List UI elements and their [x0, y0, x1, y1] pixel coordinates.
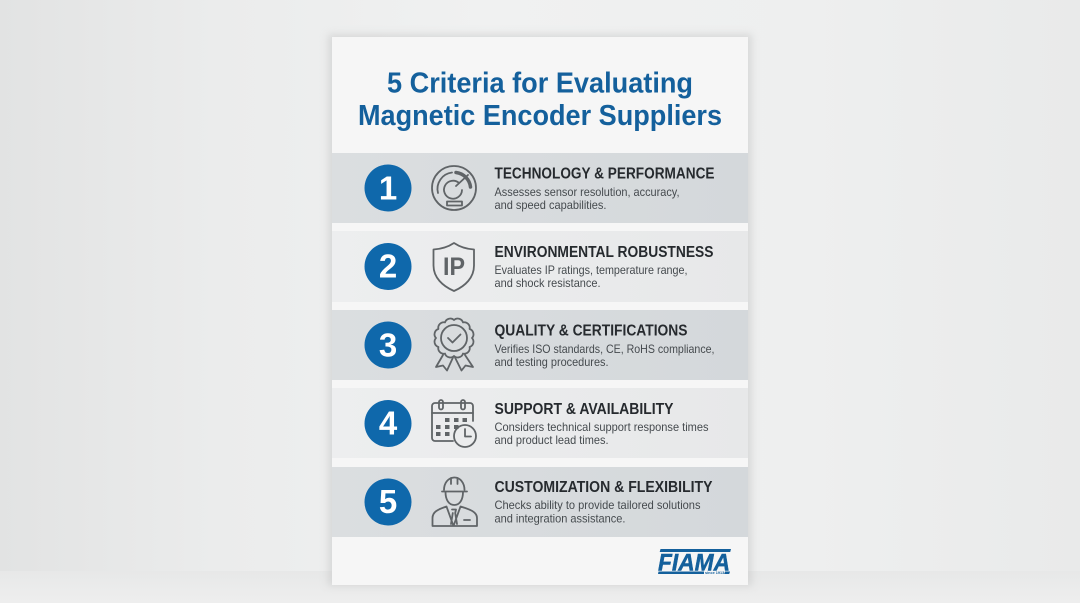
number badge 3: 3 — [379, 326, 397, 364]
logo: FIAMA: since 1913 — [705, 571, 724, 575]
icon: IP shield: IP — [443, 253, 465, 281]
icon: certification rosette — [435, 319, 473, 370]
heading 4: SUPPORT & AVAILABILITY — [494, 401, 674, 418]
icon: gauge — [432, 166, 476, 210]
row 1: technology and performance — [332, 153, 748, 223]
number badge 4 — [364, 400, 412, 447]
description 5: Checks ability to provide tailored solutions — [494, 498, 700, 512]
row 5: customization and flexibility — [332, 467, 748, 537]
icon: IP shield — [434, 243, 474, 291]
description 1: and speed capabilities. — [494, 198, 606, 212]
number badge 5 — [364, 478, 412, 526]
number badge 2 — [364, 243, 412, 290]
description 5: and integration assistance. — [494, 511, 626, 525]
description 3: Verifies ISO standards, CE, RoHS compliance, — [494, 342, 714, 356]
title — [358, 68, 722, 132]
heading 5: CUSTOMIZATION & FLEXIBILITY — [494, 479, 713, 496]
number badge 1 — [364, 164, 412, 212]
description 4: and product lead times. — [494, 433, 608, 447]
title: 5 Criteria for Evaluating — [387, 68, 693, 100]
title: Magnetic Encoder Suppliers — [358, 100, 722, 132]
icon: engineer with hard hat — [432, 477, 477, 526]
description 3 — [494, 342, 714, 369]
description 2: Evaluates IP ratings, temperature range, — [494, 263, 688, 277]
description 5 — [494, 498, 700, 525]
number badge 1: 1 — [379, 170, 397, 206]
number badge 3 — [364, 322, 412, 368]
floor — [0, 571, 1080, 603]
poster — [332, 37, 748, 585]
number badge 5: 5 — [379, 483, 397, 520]
row 2: environmental robustness — [332, 231, 748, 302]
description 4 — [494, 420, 708, 447]
description 4: Considers technical support response times — [494, 420, 708, 434]
description 3: and testing procedures. — [494, 355, 608, 369]
heading 2: ENVIRONMENTAL ROBUSTNESS — [494, 244, 714, 261]
poster shadow — [328, 34, 752, 586]
icon: calendar with clock — [432, 400, 476, 447]
logo: FIAMA: FIAMA — [658, 549, 730, 576]
row 4: support and availability — [332, 388, 748, 458]
number badge 4: 4 — [379, 404, 398, 442]
heading 3: QUALITY & CERTIFICATIONS — [494, 323, 688, 340]
description 2: and shock resistance. — [494, 276, 600, 290]
description 2 — [494, 263, 688, 290]
row 3: quality and certifications — [332, 310, 748, 380]
description 1: Assesses sensor resolution, accuracy, — [494, 185, 680, 199]
description 1 — [494, 185, 680, 212]
heading 1: TECHNOLOGY & PERFORMANCE — [494, 166, 714, 182]
number badge 2: 2 — [379, 248, 397, 284]
